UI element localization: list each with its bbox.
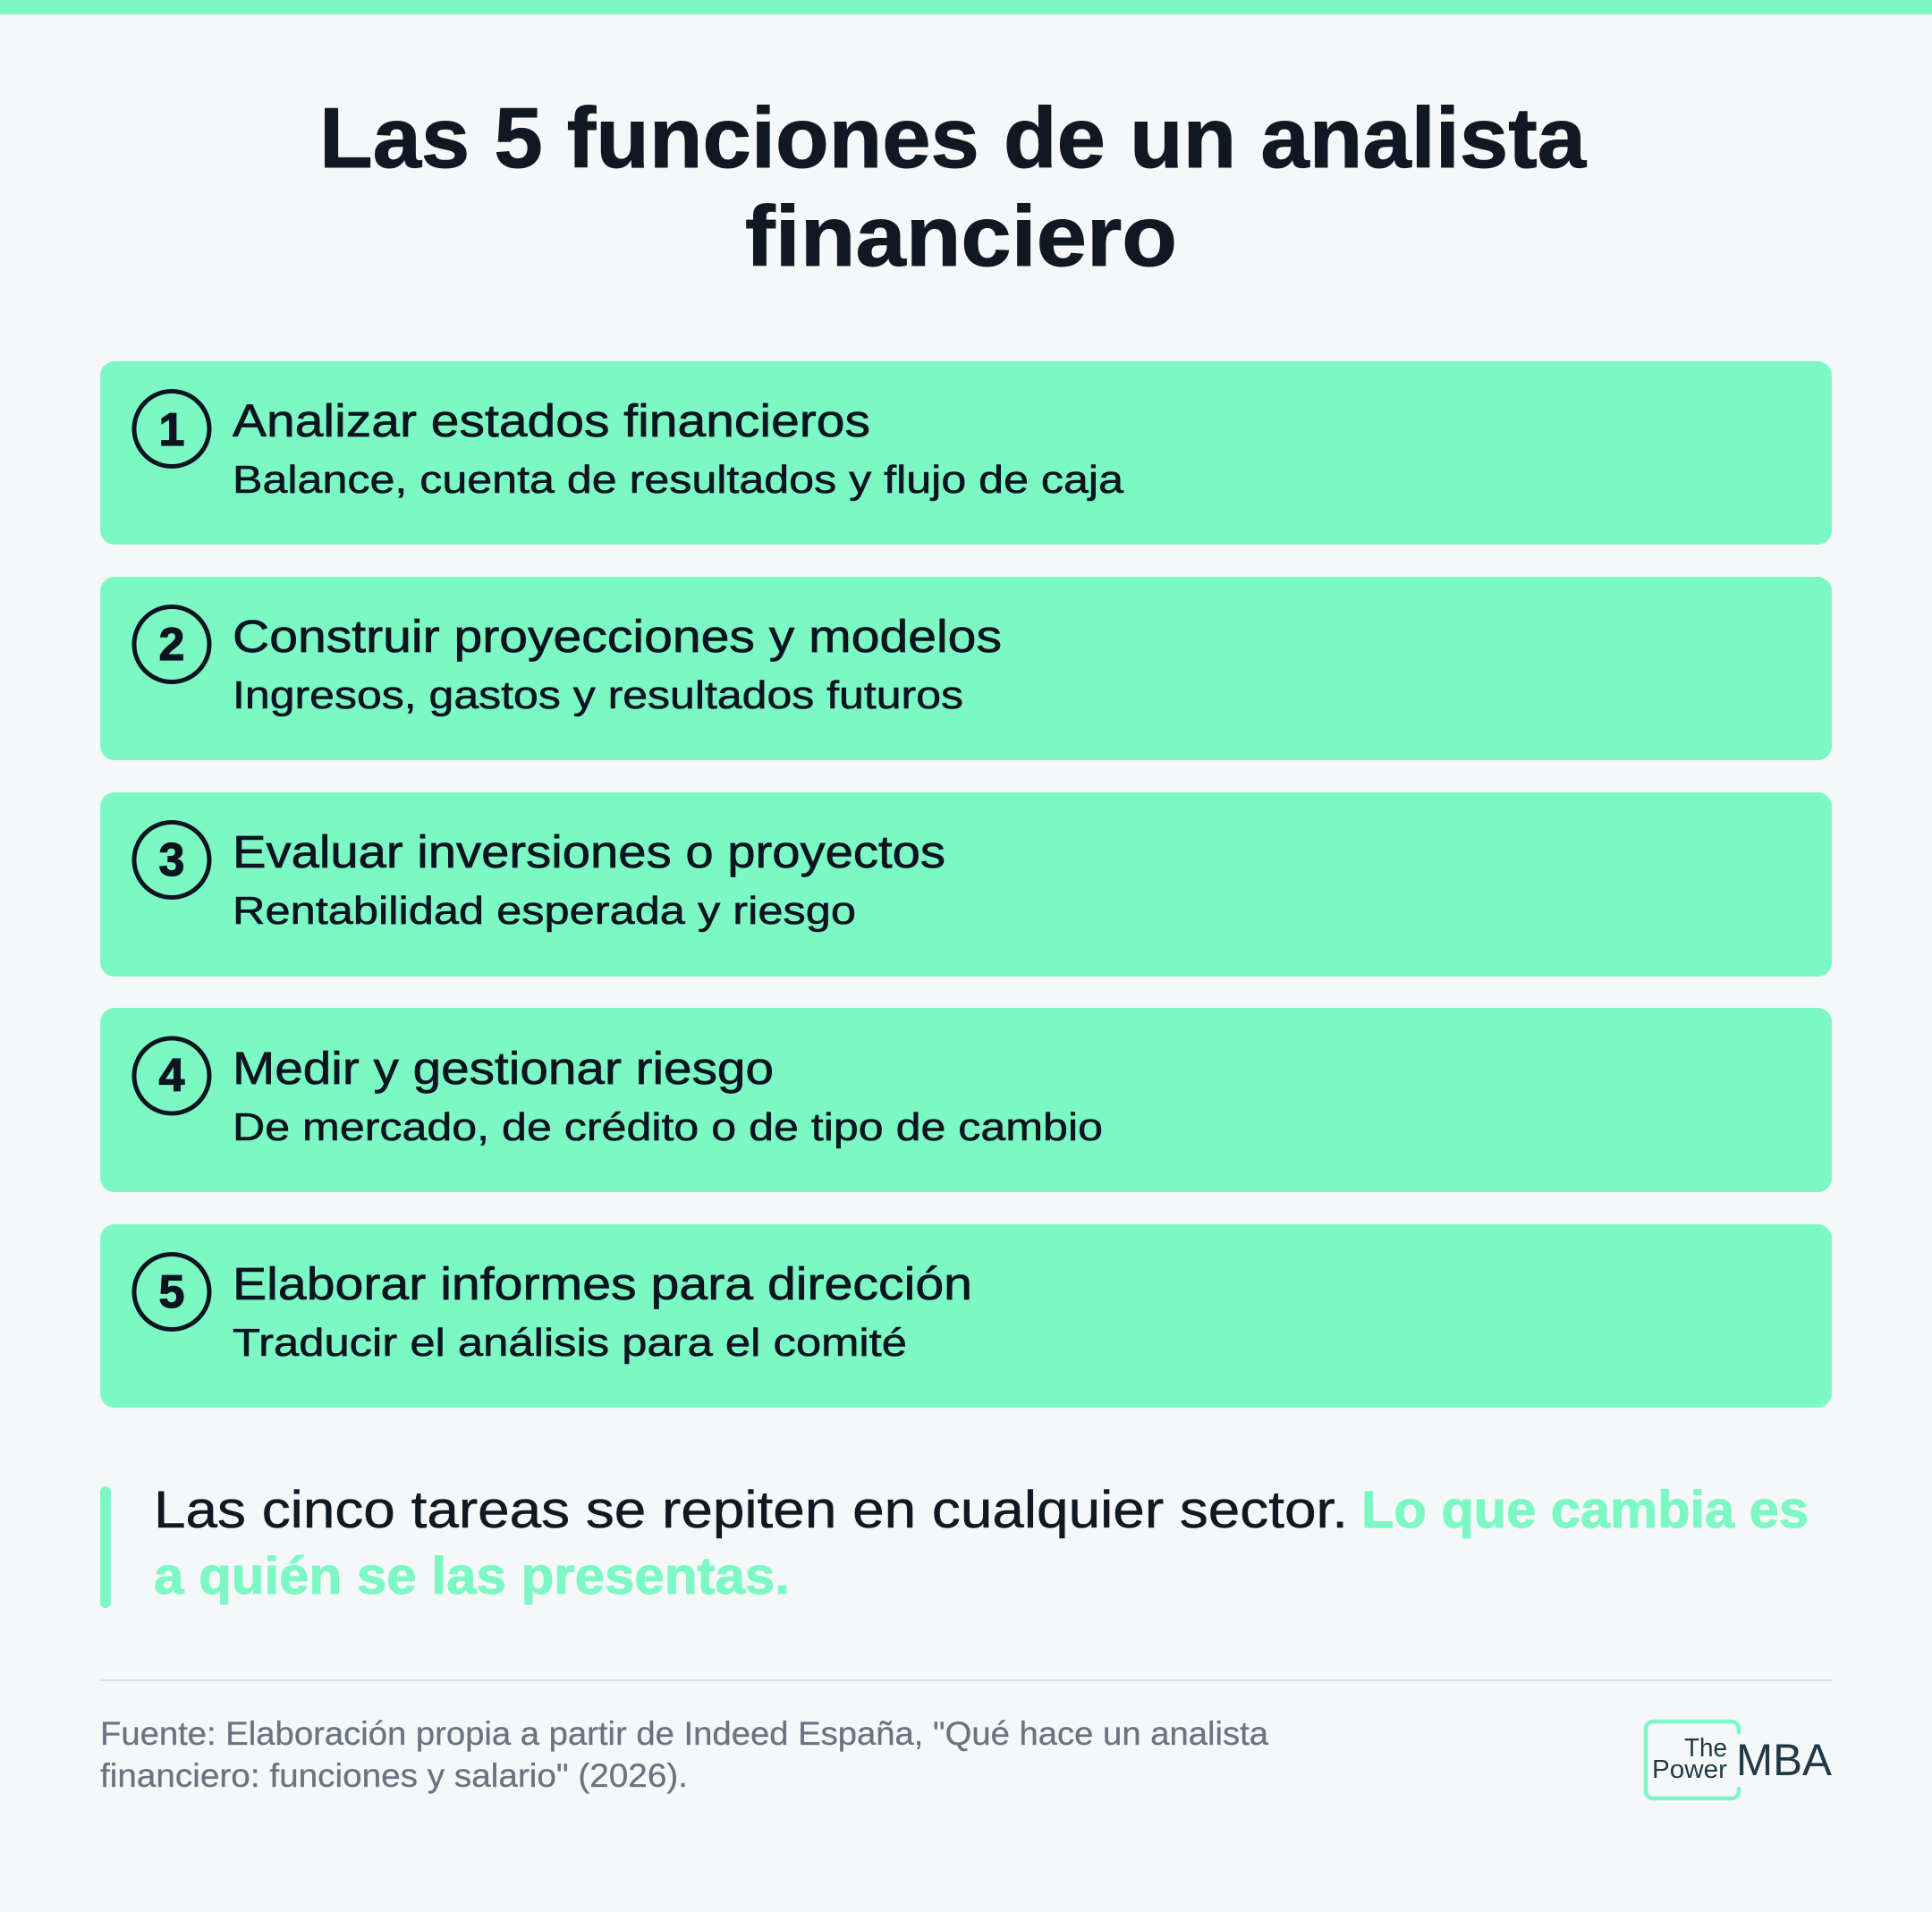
callout — [100, 1481, 1809, 1608]
description 3: Rentabilidad esperada y riesgo — [233, 889, 856, 933]
number badge 3: 3 — [159, 834, 184, 886]
panel: function 3 — [100, 792, 1832, 977]
number badge 1: 1 — [159, 404, 184, 456]
logo: The Power MBA: Power — [1652, 1755, 1727, 1784]
panel: function 1 — [100, 361, 1832, 545]
heading 3: Evaluar inversiones o proyectos — [233, 826, 945, 877]
source note: financiero: funciones y salario" (2026). — [100, 1757, 688, 1794]
description 2: Ingresos, gastos y resultados futuros — [233, 673, 963, 717]
heading 5: Elaborar informes para dirección — [233, 1258, 972, 1309]
heading 2: Construir proyecciones y modelos — [233, 611, 1002, 662]
top accent bar — [0, 0, 1932, 14]
heading 1: Analizar estados financieros — [233, 395, 870, 446]
number badge 2 — [134, 606, 209, 681]
number badge 2: 2 — [159, 619, 184, 671]
number badge 3 — [134, 823, 209, 898]
description 1: Balance, cuenta de resultados y flujo de caja — [233, 458, 1124, 502]
number badge 5 — [134, 1254, 209, 1329]
panel: function 5 — [100, 1224, 1832, 1408]
logo: The Power MBA — [1646, 1722, 1833, 1798]
description 5: Traducir el análisis para el comité — [233, 1321, 907, 1365]
title: financiero — [745, 189, 1177, 284]
number badge 4 — [134, 1038, 209, 1113]
panel: function 2 — [100, 577, 1832, 760]
panel: function 4 — [100, 1008, 1832, 1192]
title: Las 5 funciones de un analista — [319, 90, 1587, 186]
callout: Las cinco tareas se repiten en cualquier sector. — [154, 1481, 1348, 1539]
description 4: De mercado, de crédito o de tipo de cambio — [233, 1105, 1103, 1149]
number badge 4: 4 — [159, 1050, 185, 1102]
heading 4: Medir y gestionar riesgo — [233, 1043, 774, 1094]
source note — [100, 1715, 1268, 1794]
callout: Lo que cambia es — [1361, 1481, 1809, 1539]
source note: Fuente: Elaboración propia a partir de Indeed España, "Qué hace un analista — [100, 1715, 1268, 1752]
number badge 1 — [134, 392, 209, 467]
logo: The Power MBA: MBA — [1736, 1735, 1833, 1785]
callout: a quién se las presentas. — [154, 1547, 790, 1605]
number badge 5: 5 — [159, 1266, 184, 1318]
logo: The Power MBA: The — [1684, 1734, 1727, 1763]
title — [319, 90, 1587, 284]
